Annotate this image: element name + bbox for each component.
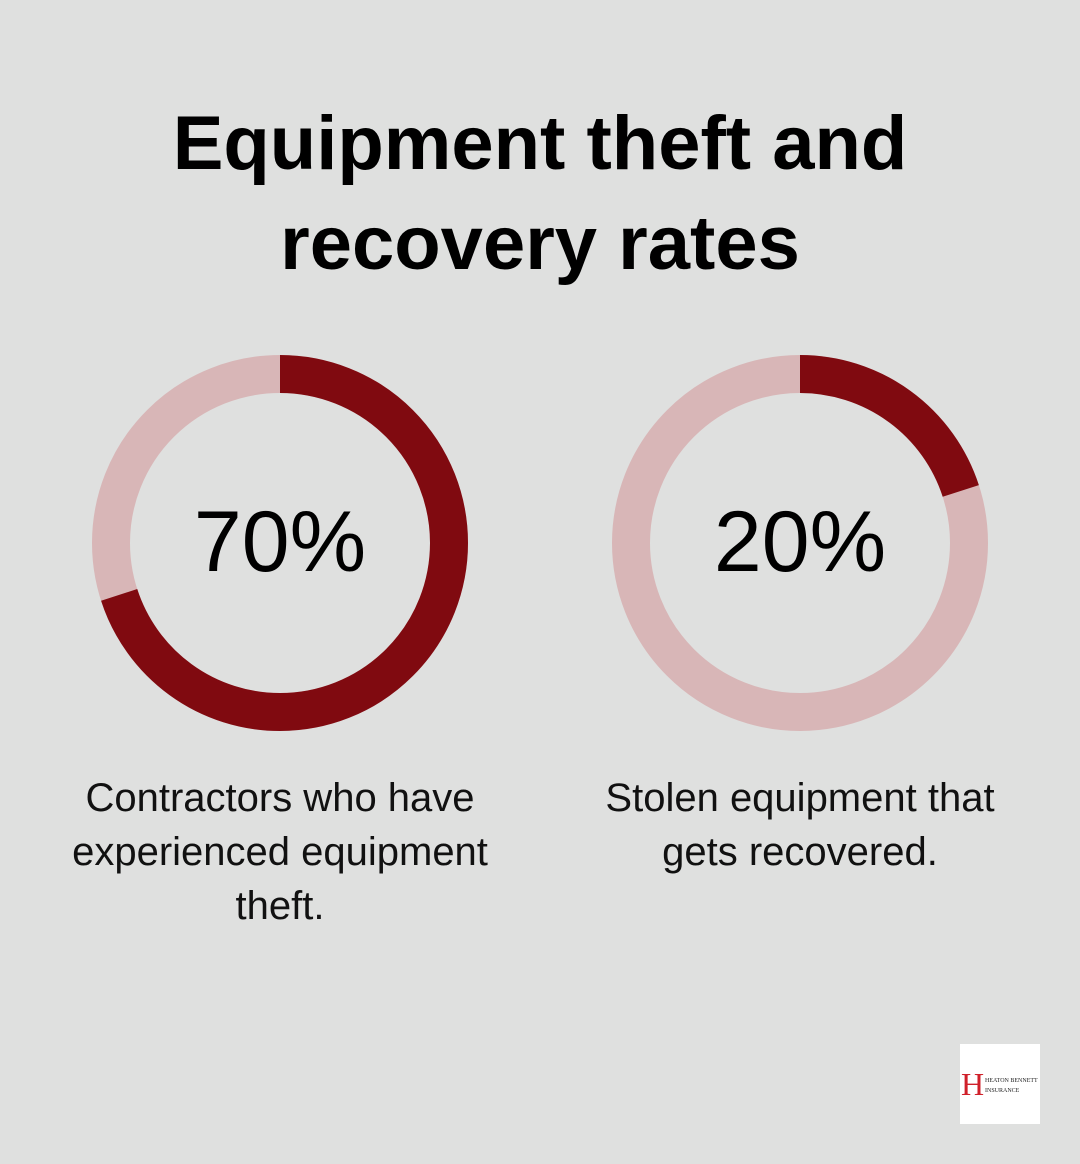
caption: right xyxy=(605,776,995,874)
title xyxy=(173,101,907,286)
caption: right: gets recovered. xyxy=(662,830,938,874)
chart: 20% donut: 20% xyxy=(714,494,886,590)
title: recovery rates xyxy=(280,201,800,286)
chart: 70% donut: 70% xyxy=(194,494,366,590)
title: Equipment theft and xyxy=(173,101,907,186)
logo: INSURANCE xyxy=(985,1088,1019,1094)
chart: 20% donut xyxy=(612,355,988,731)
logo: H xyxy=(961,1066,984,1102)
caption: left: Contractors who have experienced equipment theft. xyxy=(72,776,488,928)
chart: 70% donut xyxy=(92,355,468,731)
caption: right: Stolen equipment that xyxy=(605,776,995,820)
logo xyxy=(960,1044,1040,1124)
logo: HEATON BENNETT xyxy=(985,1078,1038,1084)
